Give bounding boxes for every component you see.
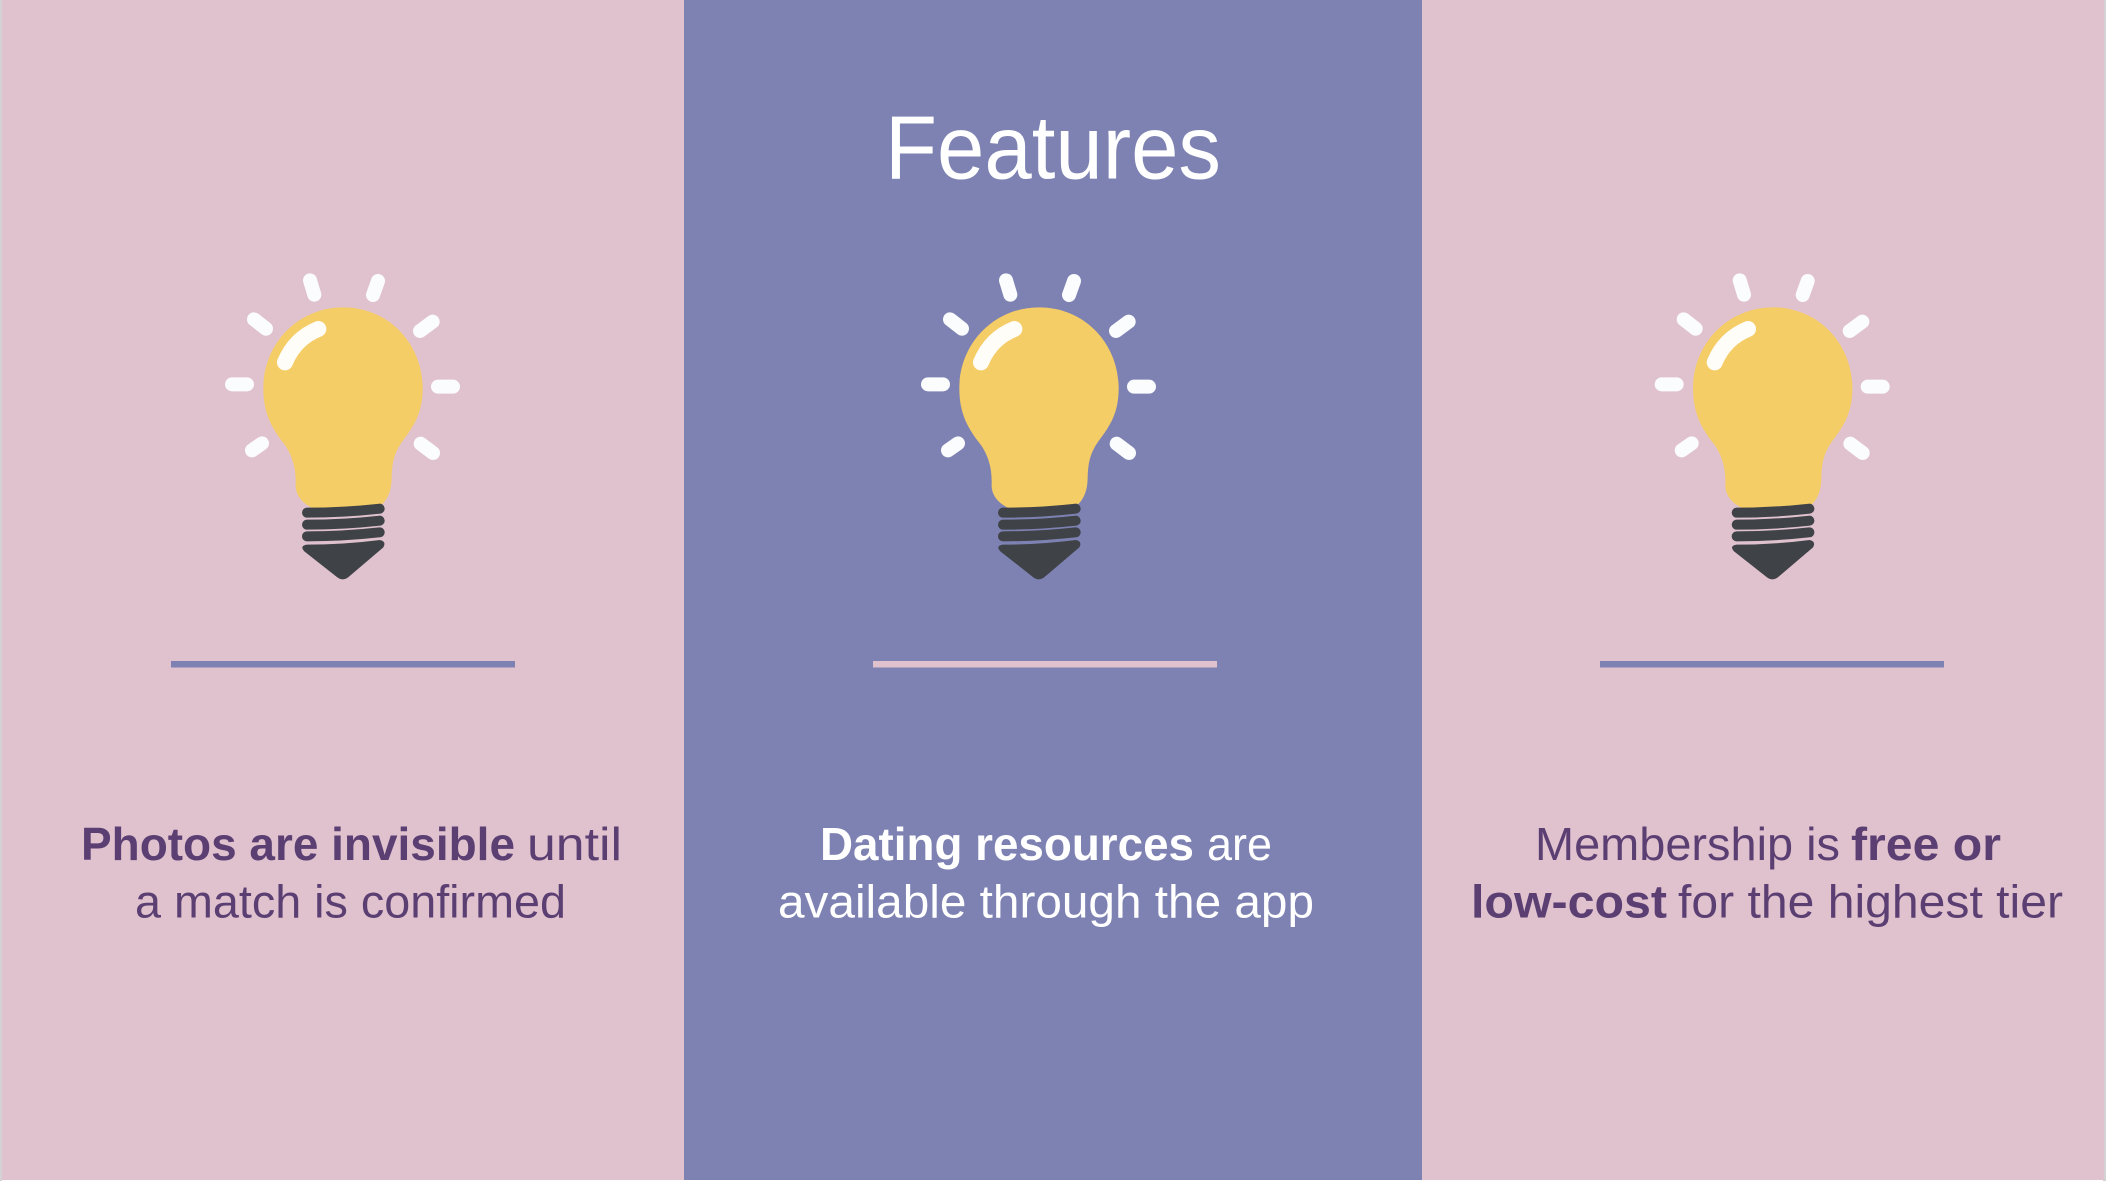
text: left feature <box>81 818 622 928</box>
text: left feature: a match is confirmed <box>135 876 566 928</box>
divider centre <box>873 661 1217 668</box>
text: centre feature: Dating resources <box>820 818 1194 870</box>
text: right feature <box>1471 818 2063 928</box>
icon: light bulb right <box>1662 280 1883 579</box>
text: left feature: until <box>527 818 622 870</box>
panel: left <box>2 0 684 1180</box>
text: centre feature <box>778 818 1314 928</box>
text: right feature: Membership is <box>1535 818 1840 870</box>
text: right feature: for the highest tier <box>1678 876 2063 928</box>
divider right <box>1600 661 1944 668</box>
text: right feature: free or <box>1851 818 2001 870</box>
panel: right <box>1422 0 2104 1180</box>
panel: centre <box>684 0 1422 1180</box>
text: left feature: Photos are invisible <box>81 818 515 870</box>
text: centre feature: are <box>1207 818 1272 870</box>
icon: light bulb centre <box>928 280 1149 579</box>
divider left <box>171 661 515 668</box>
icon: light bulb left <box>232 280 453 579</box>
text: centre feature: available through the app <box>778 876 1314 928</box>
text: right feature: low-cost <box>1471 876 1667 928</box>
title: Features <box>885 98 1221 198</box>
